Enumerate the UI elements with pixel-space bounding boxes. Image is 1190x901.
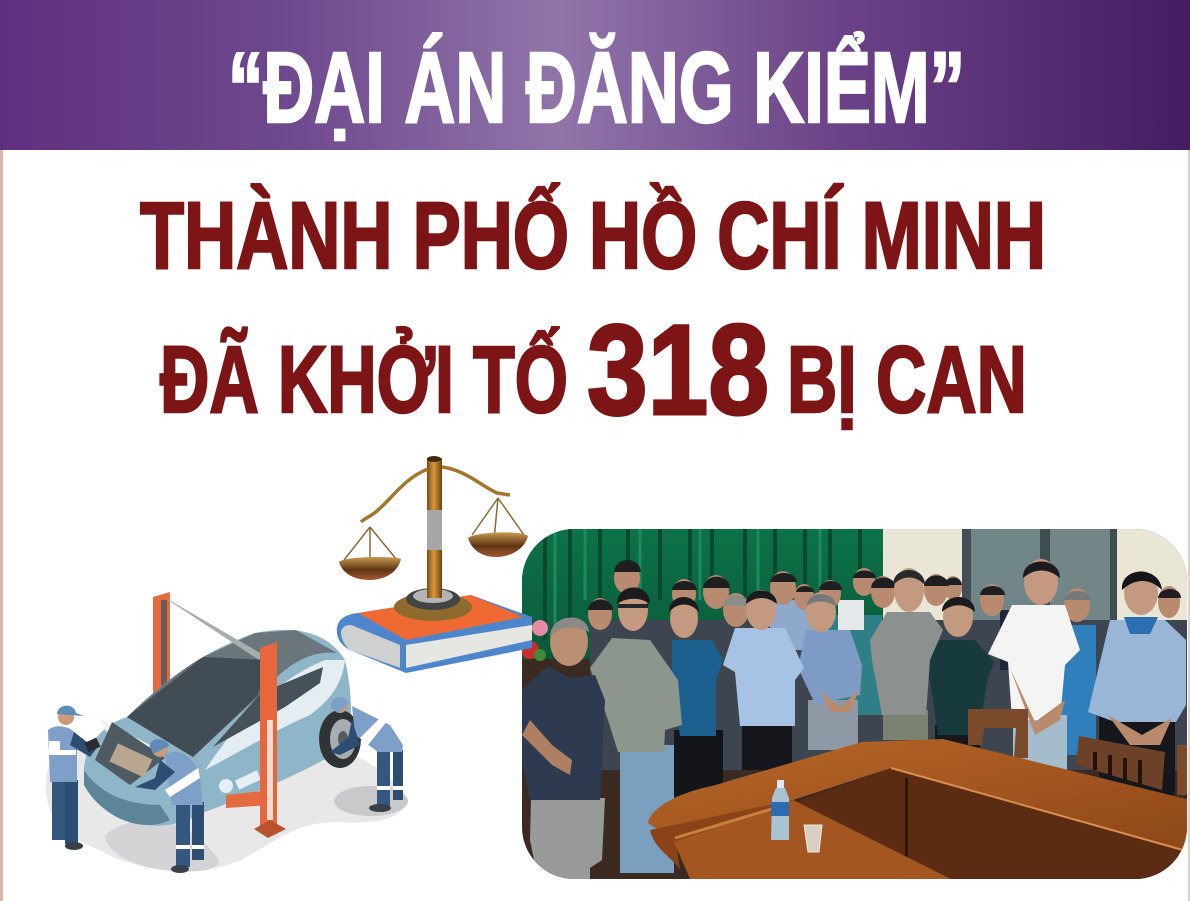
person 5 blue shirt (798, 592, 862, 750)
car wheel (319, 710, 361, 768)
ground shadow (46, 742, 406, 871)
green curtain (522, 529, 883, 659)
person 2 grey shirt (590, 588, 682, 873)
wall and doors (883, 529, 1187, 620)
back row of people (588, 560, 1190, 770)
heading line 2: ĐÃ KHỞI TỐ (160, 327, 568, 433)
right pan (468, 498, 528, 557)
person 3 blue polo (669, 597, 723, 796)
person 9 light blue polo (1088, 571, 1186, 795)
worker left (48, 706, 100, 850)
glass (804, 825, 822, 852)
flowers (521, 620, 548, 661)
scale beam (361, 467, 510, 522)
scale stand (394, 456, 472, 621)
person 8 white polo (988, 559, 1080, 771)
lift rear post (153, 592, 170, 695)
photo: defendants in meeting room (521, 529, 1190, 880)
heading line 2 (160, 299, 1027, 442)
water bottle (771, 780, 789, 840)
front row of people (522, 559, 1186, 880)
main heading (140, 183, 1046, 442)
lift front post (226, 642, 286, 838)
worker right (330, 697, 403, 812)
car hood and engine (99, 718, 150, 760)
header band (0, 0, 1190, 150)
icon: scales of justice on law book (337, 456, 532, 673)
left pan (339, 527, 401, 580)
law book (337, 595, 532, 673)
illustration: car inspection (46, 592, 408, 873)
number 318: 318 (587, 299, 769, 442)
wooden table (648, 739, 1190, 879)
person 6 grey t-shirt (870, 568, 943, 740)
wooden chairs (968, 709, 1187, 795)
lift bar (165, 598, 262, 660)
person 4 light blue shirt (723, 590, 804, 770)
car (84, 630, 351, 826)
worker at hood (135, 739, 204, 873)
person 1 patterned shirt (522, 617, 605, 880)
person 7 dark t-shirt (928, 597, 994, 748)
heading line 2: BỊ CAN (787, 327, 1027, 433)
